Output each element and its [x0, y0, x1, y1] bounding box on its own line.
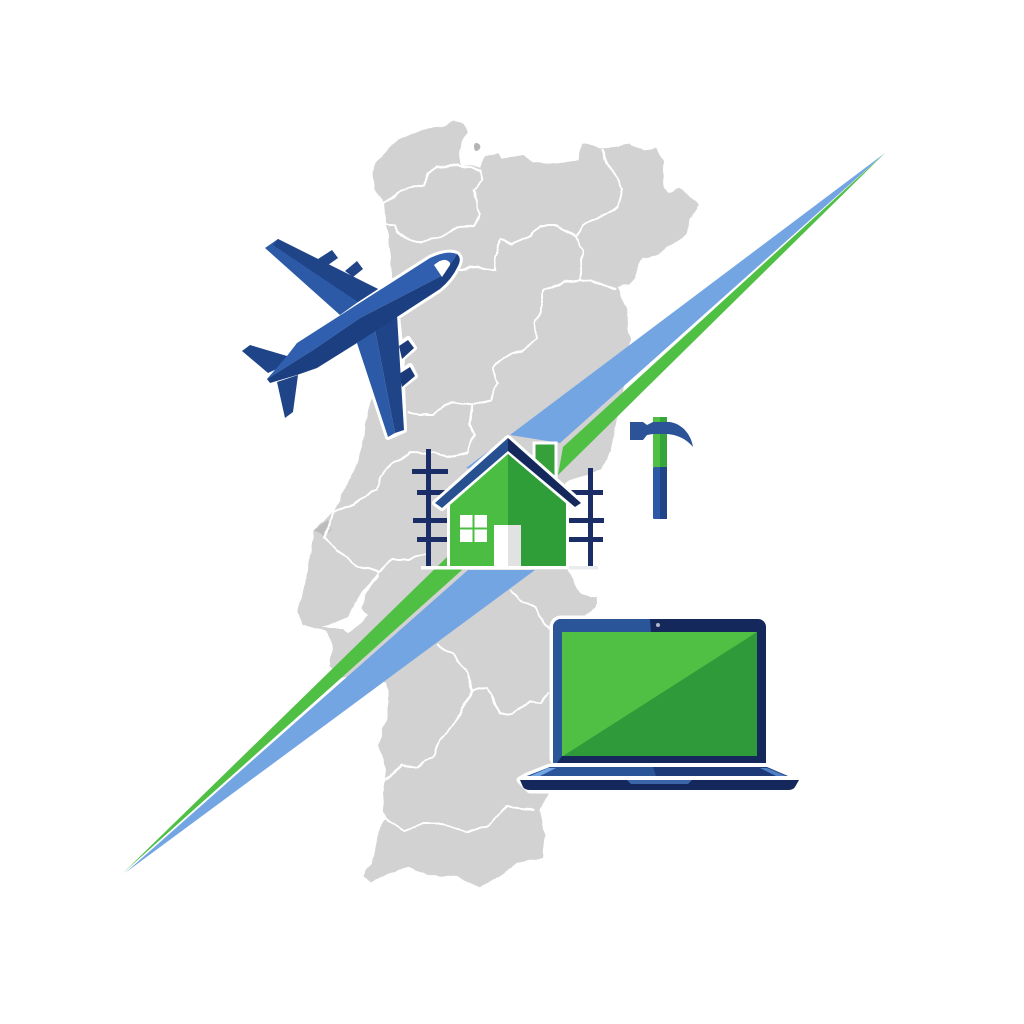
- green stripe upper: [558, 153, 885, 475]
- tail fins: [242, 345, 292, 373]
- hammer head: [630, 422, 693, 447]
- upper engines: [318, 250, 338, 265]
- chimney: [534, 443, 556, 483]
- screen light: [562, 632, 757, 756]
- map silhouette: [298, 120, 699, 888]
- hammer handle blue: [653, 467, 667, 519]
- roof left: [435, 438, 508, 508]
- tagus estuary: [323, 572, 379, 633]
- roof halo: [435, 438, 581, 508]
- lower wing shadow: [375, 315, 404, 433]
- icon: airplane: [242, 239, 460, 437]
- lower engines: [399, 340, 414, 359]
- lid blue side: [553, 619, 651, 763]
- map of Portugal: [298, 120, 699, 888]
- peniche headland: [314, 520, 331, 536]
- trackpad notch: [627, 780, 692, 784]
- screen dark: [563, 632, 757, 756]
- laptop base: [520, 780, 799, 790]
- wall right: [508, 450, 566, 566]
- roof right: [508, 438, 581, 507]
- window: [460, 515, 487, 542]
- fuselage dark: [267, 254, 460, 383]
- upper wing: [265, 239, 378, 315]
- icon: house under construction: [412, 438, 604, 570]
- door: [494, 525, 508, 566]
- upper wing shadow: [273, 239, 378, 302]
- icon: laptop: [520, 619, 799, 790]
- blue stripe lower: [125, 570, 535, 873]
- laptop halo: [520, 619, 799, 790]
- lid navy: [553, 619, 766, 763]
- green stripe lower: [123, 557, 462, 873]
- house walls outline: [450, 452, 566, 566]
- icon: hammer: [630, 417, 693, 519]
- scaffold right: [569, 468, 604, 566]
- lower wing: [357, 330, 395, 437]
- ground line: [421, 566, 598, 570]
- region borders: [325, 150, 623, 832]
- windshield: [434, 260, 450, 277]
- hammer handle green: [653, 417, 667, 467]
- diagonal swoosh: lower section: [123, 557, 535, 873]
- island dot: [475, 143, 481, 151]
- laptop deck: [527, 767, 788, 776]
- fuselage light: [267, 253, 457, 379]
- scaffold left: [412, 449, 448, 566]
- plane white halo: [267, 253, 460, 437]
- diagonal swoosh: upper section: [466, 153, 885, 475]
- webcam: [656, 623, 660, 627]
- wall left: [450, 450, 508, 566]
- blue sliver by roof: [466, 450, 490, 470]
- blue stripe upper: [510, 153, 885, 443]
